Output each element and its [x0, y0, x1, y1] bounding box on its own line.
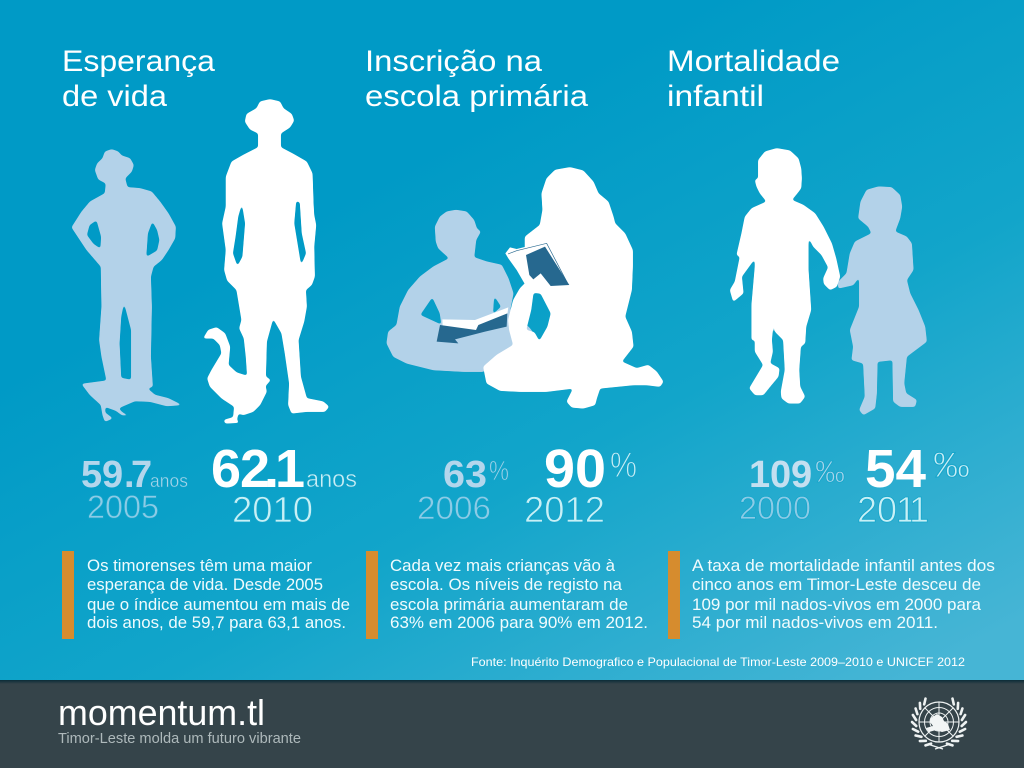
stat: 54 per mille 2011: 54 — [865, 439, 926, 499]
footer band — [0, 680, 1024, 768]
text block: infant mortality: 54 por mil nados-vivos em 2011. — [692, 614, 938, 632]
stat: 63% 2006 — [417, 454, 509, 526]
stat: 62.1 anos 2010: anos — [306, 466, 357, 493]
heading: Esperança de vida: de vida — [62, 80, 168, 113]
illustration: boy 2011 — [730, 148, 840, 403]
stat: 62.1 anos 2010: 2010 — [232, 489, 313, 530]
text block: infant mortality: A taxa de mortalidade infantil antes dos — [692, 557, 995, 575]
accent bar 2 — [366, 551, 378, 639]
stat: 109 per mille 2000: 109 — [749, 454, 812, 496]
accent bar 1 — [62, 551, 74, 639]
stat: 109 per mille 2000: ‰ — [815, 454, 845, 489]
illustration: girl 2000 — [838, 187, 927, 415]
text block: infant mortality — [692, 557, 995, 632]
illustration: boy reading 2006 — [387, 210, 540, 372]
icon: UN emblem — [912, 699, 966, 749]
stat: 109 per mille 2000 — [739, 454, 845, 526]
heading: Esperança de vida: Esperança — [62, 45, 216, 78]
heading: Inscrição na escola primária: escola primária — [365, 80, 589, 113]
text block: life expectancy: esperança de vida. Desde 2005 — [87, 576, 323, 594]
text block: school enrolment: escola primária aumentaram de — [390, 596, 628, 614]
text block: school enrolment — [390, 557, 648, 632]
illustration: man and goose 2010 — [203, 99, 329, 423]
illustration: girl reading 2012 — [483, 167, 663, 408]
source note: Fonte: Inquérito Demografico e Populacional de Timor-Leste 2009–2010 e UNICEF 2012 — [471, 655, 965, 669]
text block: infant mortality: cinco anos em Timor-Leste desceu de — [692, 576, 981, 594]
text block: school enrolment: 63% em 2006 para 90% em 2012. — [390, 614, 648, 632]
stat: 63% 2006: 2006 — [417, 490, 491, 526]
stat: 59.7 anos 2005 — [81, 454, 188, 525]
stat: 59.7 anos 2005: anos — [150, 471, 188, 491]
stat: 90% 2012: % — [610, 446, 637, 485]
accent bar 3 — [668, 551, 680, 639]
text block: life expectancy: Os timorenses têm uma maior — [87, 557, 313, 575]
stat: 54 per mille 2011: ‰ — [933, 446, 970, 485]
stat: 54 per mille 2011: 2011 — [857, 489, 929, 530]
heading: Inscrição na escola primária — [365, 45, 589, 113]
stat: 109 per mille 2000: 2000 — [739, 490, 811, 526]
text block: school enrolment: Cada vez mais crianças vão à — [390, 557, 616, 575]
footer title: momentum.tl — [58, 692, 265, 733]
illustration: man and bird 2005 — [72, 149, 182, 422]
stat: 90% 2012: 90 — [544, 439, 606, 499]
heading: Inscrição na escola primária: Inscrição na — [365, 45, 543, 78]
stat: 62.1 anos 2010: 62.1 — [211, 439, 305, 499]
stat: 59.7 anos 2005: 2005 — [87, 489, 159, 525]
stat: 90% 2012 — [524, 439, 637, 530]
stat: 63% 2006: 63 — [443, 454, 487, 496]
heading: Esperança de vida — [62, 45, 216, 113]
heading: Mortalidade infantil: infantil — [667, 80, 764, 113]
stat: 62.1 anos 2010 — [211, 439, 357, 530]
heading: Mortalidade infantil — [667, 45, 840, 113]
footer subtitle: Timor-Leste molda um futuro vibrante — [58, 731, 301, 747]
stat: 54 per mille 2011 — [857, 439, 970, 530]
stat: 63% 2006: % — [489, 455, 509, 486]
stat: 90% 2012: 2012 — [524, 489, 605, 530]
text block: infant mortality: 109 por mil nados-vivos em 2000 para — [692, 596, 982, 614]
heading: Mortalidade infantil: Mortalidade — [667, 45, 840, 78]
text block: life expectancy: que o índice aumentou em mais de — [87, 596, 350, 614]
text block: life expectancy: dois anos, de 59,7 para 63,1 anos. — [87, 614, 346, 632]
stat: 59.7 anos 2005: 59.7 — [81, 454, 152, 496]
text block: life expectancy — [87, 557, 350, 632]
text block: school enrolment: escola. Os níveis de registo na — [390, 576, 623, 594]
